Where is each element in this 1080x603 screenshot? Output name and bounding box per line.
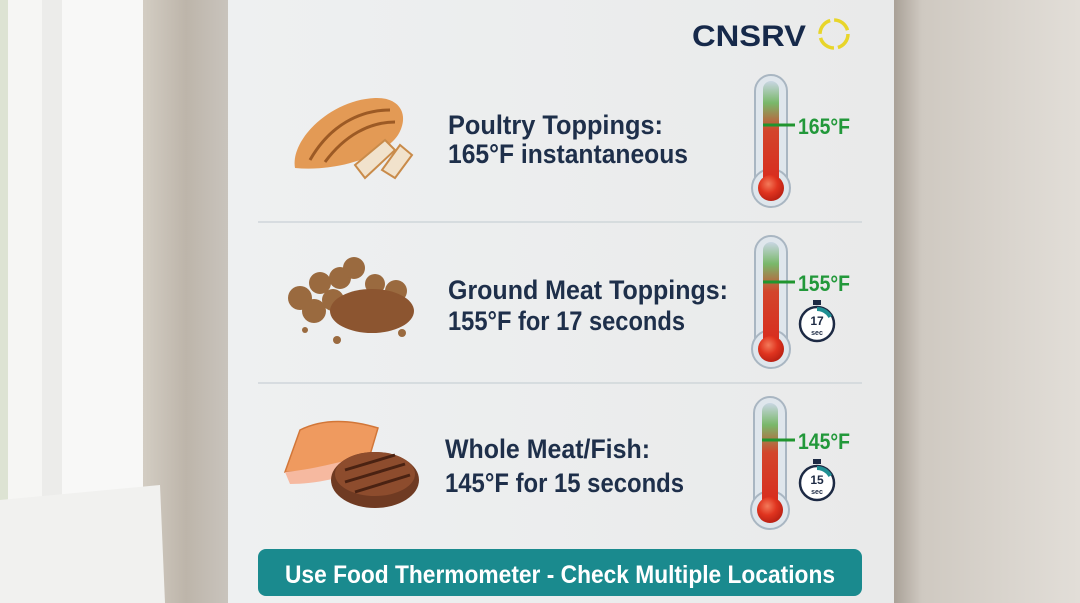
row 1: poultry: 165°F instantaneous: [448, 139, 688, 169]
row 2: ground meat: 155°F for 17 seconds: [448, 306, 685, 336]
row 3: whole meat/fish: 145°F for 15 seconds: [445, 468, 684, 498]
thermometer 155 with stopwatch: [752, 236, 850, 368]
thermometer 165: [752, 75, 850, 207]
thermometer 155 with stopwatch: 17: [810, 314, 824, 328]
logo: [692, 20, 848, 53]
banner: Use Food Thermometer - Check Multiple Locations: [285, 561, 835, 589]
thermometer 155 with stopwatch: sec: [811, 330, 823, 337]
thermometer 145 with stopwatch: 145°F: [798, 429, 850, 454]
text: whole meat: Whole Meat/Fish:: [445, 434, 650, 464]
thermometer 145 with stopwatch: 15: [810, 473, 824, 487]
banner: [258, 549, 862, 596]
text: ground meat: Ground Meat Toppings:: [448, 275, 728, 305]
icon: chicken breast: [295, 98, 412, 178]
logo: CNSRV: [692, 20, 806, 53]
icon: salmon and steak: [285, 421, 419, 508]
text: poultry: Poultry Toppings:: [448, 110, 663, 140]
thermometer 155 with stopwatch: 155°F: [798, 271, 850, 296]
thermometer 145 with stopwatch: sec: [811, 489, 823, 496]
row 1: poultry: [295, 75, 850, 207]
poster panel: [228, 0, 894, 603]
row 2: ground meat: [288, 236, 850, 368]
thermometer 145 with stopwatch: [751, 397, 850, 529]
row 3: whole meat/fish: [285, 397, 850, 529]
thermometer 165: 165°F: [798, 114, 850, 139]
icon: ground meat: [288, 257, 414, 344]
